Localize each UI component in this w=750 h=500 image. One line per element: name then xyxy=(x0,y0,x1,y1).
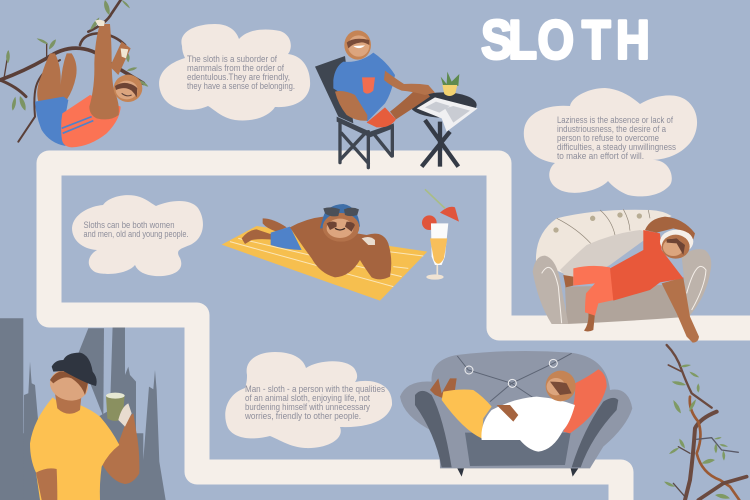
pillow xyxy=(563,369,607,433)
neck and head xyxy=(55,393,82,414)
cloud: women and men text: Sloths can be both women xyxy=(84,220,175,230)
shorts xyxy=(367,107,396,127)
cup xyxy=(362,77,375,94)
table xyxy=(410,92,477,167)
cloud: laziness text: Laziness is the absence or lack of xyxy=(557,115,673,125)
sofa xyxy=(533,209,711,324)
cloud: laziness text: to make an effort of will. xyxy=(557,151,644,161)
body xyxy=(290,217,391,279)
cocktail xyxy=(422,189,459,280)
cloud: suborder text: edentulous.They are friendly, xyxy=(187,72,290,82)
glass xyxy=(106,395,125,421)
sloth lounging on beige sofa xyxy=(533,209,711,343)
sloth napping on grey sofa xyxy=(400,351,632,477)
hand on towel xyxy=(362,237,375,245)
cloud: laziness text: person to refuse to overcome xyxy=(557,133,659,143)
head xyxy=(344,30,371,60)
cloud: laziness text: industriousness, the desire of a xyxy=(557,124,666,134)
cloud: man-sloth text: worries, friendly to other people. xyxy=(244,411,361,421)
shirt xyxy=(333,53,395,122)
title: SLOTH xyxy=(481,9,650,70)
branches xyxy=(667,345,747,500)
leaves xyxy=(6,0,148,111)
sloth xyxy=(563,217,699,343)
cloud: man-sloth text: of an animal sloth, enjoying life, not xyxy=(245,393,370,403)
city skyline xyxy=(0,312,166,500)
sloth in yellow shirt with hat xyxy=(30,353,139,500)
head xyxy=(320,204,360,242)
arms xyxy=(384,71,435,95)
cloud: women and men text: and men, old and young people. xyxy=(84,229,188,239)
cloud: laziness text: difficulties, a steady unwillingness xyxy=(557,142,677,152)
cloud: suborder text xyxy=(159,24,310,120)
branch bottom right xyxy=(664,345,747,500)
legs xyxy=(390,88,430,119)
cloud: man-sloth text xyxy=(225,352,392,448)
sloth xyxy=(430,371,576,452)
leaves xyxy=(664,364,730,499)
sloth sunbathing on towel xyxy=(222,189,459,301)
head xyxy=(114,75,142,102)
sloth relaxing at table xyxy=(315,30,478,168)
shorts xyxy=(271,227,302,250)
legs xyxy=(242,229,277,244)
cloud: suborder text: they have a sense of belonging. xyxy=(187,81,295,91)
legs xyxy=(37,53,77,102)
chair xyxy=(315,56,394,137)
shirt xyxy=(61,95,121,147)
torso xyxy=(30,397,119,500)
sofa xyxy=(400,351,632,477)
cloud: man-sloth text: burdening himself with unnecessary xyxy=(245,402,371,412)
cloud: women and men text xyxy=(72,195,203,276)
newspaper xyxy=(417,97,478,132)
branches xyxy=(0,0,143,142)
sloth hanging from branch xyxy=(0,0,148,147)
shorts xyxy=(35,97,68,146)
arms xyxy=(89,24,119,119)
cloud: suborder text: mammals from the order of xyxy=(187,63,285,73)
plant pot xyxy=(441,72,459,96)
towel xyxy=(222,226,427,301)
cloud: suborder text: The sloth is a suborder of xyxy=(187,54,278,64)
arm xyxy=(102,413,139,484)
cloud: laziness text xyxy=(524,88,697,196)
cloud: man-sloth text: Man - sloth - a person with the qualities xyxy=(245,384,386,394)
hat xyxy=(52,353,97,386)
winding path xyxy=(49,163,750,500)
